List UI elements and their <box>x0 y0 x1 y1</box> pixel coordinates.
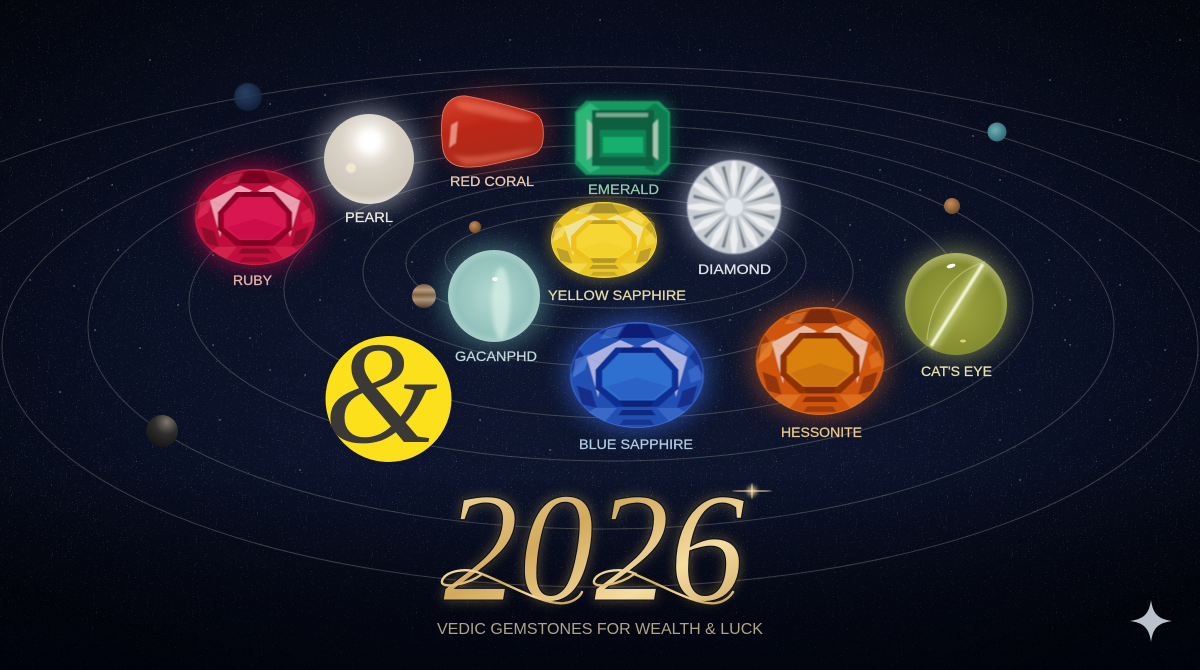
gem: yellow sapphire <box>548 199 686 303</box>
subtitle: VEDIC GEMSTONES FOR WEALTH & LUCK <box>437 621 763 638</box>
coral stone <box>442 96 543 167</box>
blue sapphire stone <box>570 322 704 428</box>
title: 2026: 2026 <box>443 461 745 634</box>
planet: blue, upper left <box>234 83 262 111</box>
ruby stone <box>195 169 315 265</box>
gem: blue sapphire <box>566 318 708 452</box>
label: gacanphd: GACANPHD <box>455 348 537 364</box>
label: emerald: EMERALD <box>588 181 659 197</box>
planet: small brown, centre <box>469 221 481 233</box>
planet: teal, upper right <box>988 122 1006 142</box>
label: hessonite: HESSONITE <box>781 424 862 440</box>
gem: cat's eye <box>901 249 1011 379</box>
emerald stone <box>575 101 670 175</box>
yellow sapphire stone <box>551 202 657 278</box>
gem: ruby <box>191 165 319 288</box>
label: red coral: RED CORAL <box>450 173 534 189</box>
hessonite stone <box>756 307 884 415</box>
gem: moonstone <box>442 244 546 364</box>
gem: diamond <box>684 157 784 277</box>
label: ruby: RUBY <box>233 272 273 288</box>
planet: banded, centre left <box>412 284 436 308</box>
title: 2026: 2026 <box>443 461 745 634</box>
icon: sparkle watermark <box>1130 600 1172 642</box>
logo: yellow circle with ampersand: & <box>324 312 438 474</box>
decorative swashes and glint <box>442 570 733 603</box>
label: yellow sapphire: YELLOW SAPPHIRE <box>548 287 686 303</box>
planet: grey moon, lower left <box>146 415 178 447</box>
label: cat's eye: CAT'S EYE <box>921 363 992 379</box>
label: diamond: DIAMOND <box>698 261 771 277</box>
planet: orange, right <box>944 198 960 214</box>
gem: emerald <box>572 99 673 197</box>
label: pearl: PEARL <box>345 209 393 225</box>
gem: pearl <box>319 109 419 225</box>
moonstone <box>448 250 540 342</box>
cat's eye stone <box>905 253 1007 355</box>
pearl stone <box>324 114 414 204</box>
gem: red coral <box>438 93 546 189</box>
orbit lines <box>0 67 1200 587</box>
label: blue sapphire: BLUE SAPPHIRE <box>579 436 693 452</box>
diamond stone <box>687 160 781 254</box>
gem: hessonite <box>752 303 888 440</box>
